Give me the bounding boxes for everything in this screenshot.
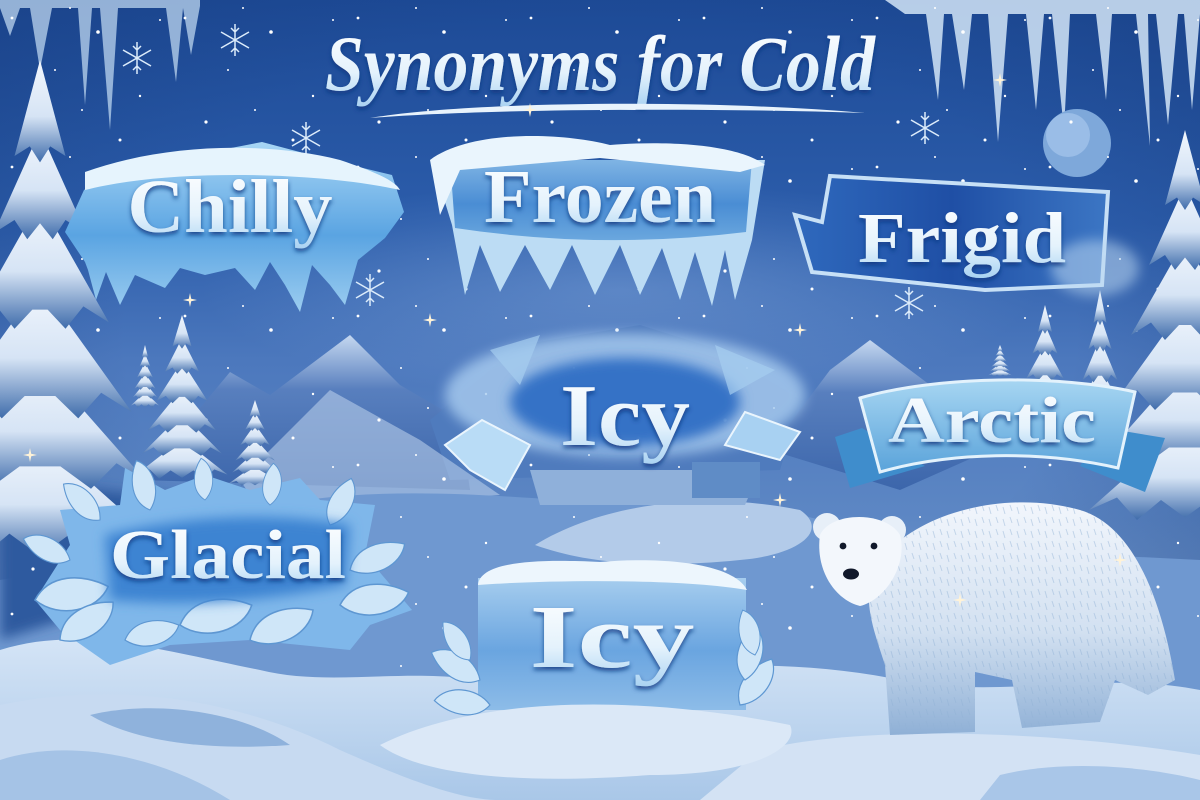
bear head [813,513,906,606]
snowflake decorations [123,24,939,319]
crystal leaves: Glacial: Glacial [110,517,346,594]
ice block: Icy: Icy [530,588,694,687]
plaque: Frozen [430,136,765,306]
tree group: left [0,60,281,559]
plaque: Frigid [795,176,1139,296]
foreground snow [0,640,1200,800]
moon [1043,109,1111,177]
plaque: Frozen: Frozen [484,155,716,239]
polar bear [813,502,1175,735]
plaque: Chilly: Chilly [128,165,332,249]
banner: Arctic: Arctic [888,384,1096,457]
laurel leaves [430,610,785,727]
crystal cluster: Icy: Icy [560,368,690,465]
plaque: Frigid: Frigid [858,198,1066,278]
mid-ground snow [0,480,1200,800]
crystal cluster: Icy [445,333,805,505]
distant mountains [140,325,990,510]
ice block: Icy [380,560,791,779]
icicles: top right [885,0,1200,146]
plaque: Chilly [65,142,404,312]
tree group: right [988,130,1200,520]
title: Synonyms for Cold [325,20,876,107]
crystal leaves: Glacial [22,458,412,665]
icicles: top left [0,0,200,130]
banner: Arctic [835,380,1165,492]
sparkles [23,73,1127,607]
